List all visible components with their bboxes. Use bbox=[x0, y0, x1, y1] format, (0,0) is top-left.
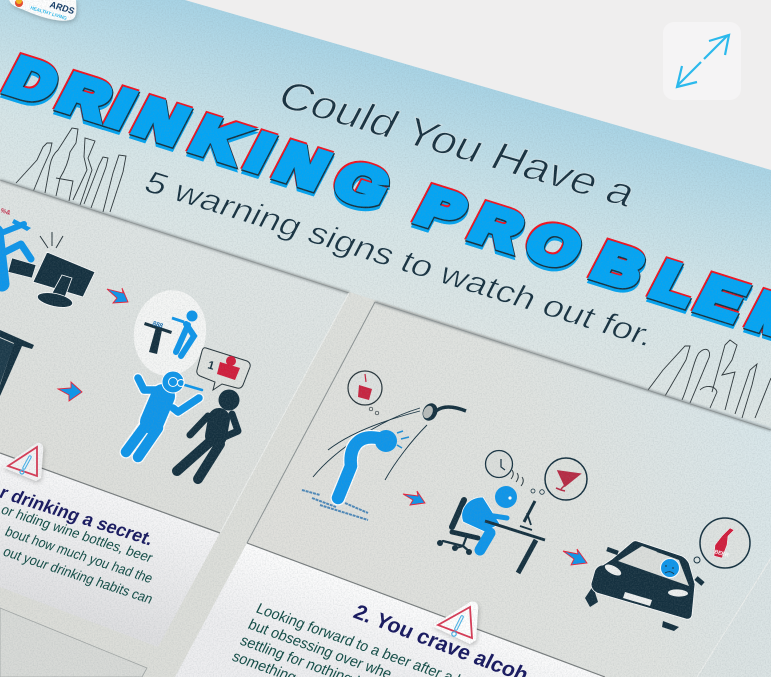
desk bbox=[485, 501, 545, 573]
heading: could you have a: Could You Have a bbox=[271, 74, 644, 215]
arrow 2 bbox=[58, 382, 82, 401]
shower scene bbox=[302, 371, 466, 520]
tv bbox=[33, 252, 95, 297]
arrow 3 bbox=[403, 491, 425, 505]
bar counter bbox=[0, 330, 34, 396]
panel 1 bbox=[0, 180, 349, 533]
scene: falling figure and tv bbox=[0, 207, 95, 310]
caption panel 1 bbox=[0, 453, 220, 647]
couch bbox=[8, 258, 36, 278]
speech bubble bbox=[197, 348, 250, 390]
warning icon 1 bbox=[2, 443, 43, 481]
bent figure bbox=[338, 437, 378, 498]
water arcs bbox=[313, 408, 420, 477]
shower head bbox=[420, 401, 440, 423]
worker bbox=[462, 497, 500, 532]
puddle bbox=[302, 490, 368, 520]
logo badge: HEALTHY LIVING bbox=[30, 5, 68, 21]
desk scene bbox=[437, 450, 587, 573]
caption panel 2 bbox=[175, 543, 605, 677]
chair bbox=[443, 500, 478, 552]
arrow 4 bbox=[563, 549, 587, 565]
car: BEER bbox=[713, 549, 730, 559]
steam bbox=[511, 470, 523, 486]
car bbox=[585, 518, 750, 631]
arrow 1 bbox=[107, 288, 128, 303]
bottle outlines right bbox=[648, 340, 771, 418]
panel 3 corner bbox=[0, 608, 147, 677]
bottle outlines left bbox=[16, 128, 126, 212]
blue figure bbox=[0, 224, 31, 284]
thought: drink bbox=[348, 371, 382, 405]
blue man shrugging bbox=[126, 371, 202, 457]
thought bubble: 888 bbox=[151, 320, 164, 330]
caption body 1: out your drinking habits can bbox=[1, 544, 156, 607]
speech bubble: 1 bbox=[206, 359, 216, 373]
logo badge bbox=[9, 0, 76, 21]
caption title 1: r drinking a secret. bbox=[0, 482, 157, 549]
thought bubble bbox=[127, 284, 213, 382]
caption body 1: bout how much you had the bbox=[3, 524, 156, 586]
caption body 1: or hiding wine bottles, beer bbox=[0, 502, 156, 565]
heading: warning signs: 5 warning signs to watch out for. bbox=[139, 165, 661, 353]
thought: cocktail bbox=[545, 458, 587, 500]
expand icon bbox=[663, 22, 741, 100]
clock bbox=[486, 450, 512, 478]
panel 2 bbox=[247, 302, 771, 677]
caption body 1 bbox=[0, 502, 156, 607]
thought: bottle bbox=[700, 518, 750, 568]
woman silhouette bbox=[177, 390, 240, 479]
warning icon 2 bbox=[432, 601, 478, 644]
